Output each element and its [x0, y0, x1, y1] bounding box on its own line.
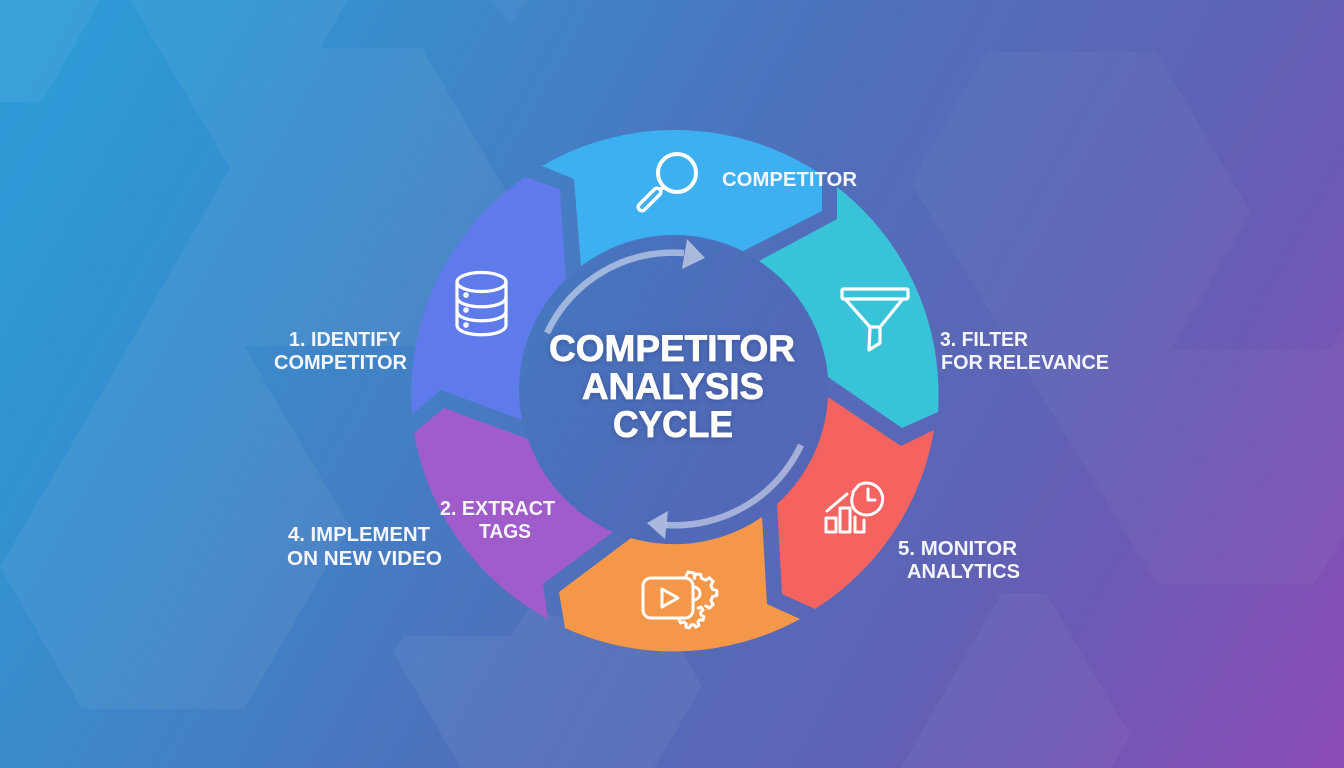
label: step 2 extract tags: 2. EXTRACT — [440, 498, 555, 520]
label: step 4 implement on new video: ON NEW VIDEO — [287, 548, 442, 570]
label: step 4 implement on new video — [287, 524, 442, 570]
label: step 3 filter for relevance — [940, 329, 1109, 374]
label: step 1 identify competitor: 1. IDENTIFY — [289, 329, 402, 351]
label: step 5 monitor analytics: ANALYTICS — [907, 561, 1020, 583]
segment: search competitor — [542, 130, 822, 266]
label: step 5 monitor analytics — [898, 538, 1020, 583]
title: COMPETITOR — [549, 328, 795, 369]
label: step 2 extract tags — [440, 498, 555, 543]
label: competitor: COMPETITOR — [722, 169, 858, 191]
segment: extract tags — [414, 408, 613, 619]
label: step 4 implement on new video: 4. IMPLEMENT — [288, 524, 430, 546]
label: step 3 filter for relevance: 3. FILTER — [940, 329, 1029, 351]
label: step 1 identify competitor — [274, 329, 408, 374]
title: CYCLE — [613, 404, 733, 445]
icon: magnifying glass — [642, 154, 696, 207]
title — [549, 328, 795, 445]
segment: filter — [759, 187, 939, 428]
icon: video with gears — [643, 572, 717, 628]
icon: chart with clock — [826, 483, 883, 532]
label: step 3 filter for relevance: FOR RELEVANCE — [941, 352, 1109, 374]
center disc — [519, 236, 829, 546]
segment: monitor analytics — [777, 397, 934, 609]
label: step 5 monitor analytics: 5. MONITOR — [898, 538, 1018, 560]
segment: identify competitor — [411, 177, 566, 420]
icon: database — [457, 272, 506, 335]
arrow: bottom circular arrow — [647, 445, 801, 539]
arrow: top circular arrow — [547, 239, 705, 333]
icon: funnel — [842, 289, 908, 350]
label: step 1 identify competitor: COMPETITOR — [274, 352, 408, 374]
label: step 2 extract tags: TAGS — [479, 521, 531, 543]
title: ANALYSIS — [582, 366, 764, 407]
segment: implement on new video — [559, 517, 800, 651]
